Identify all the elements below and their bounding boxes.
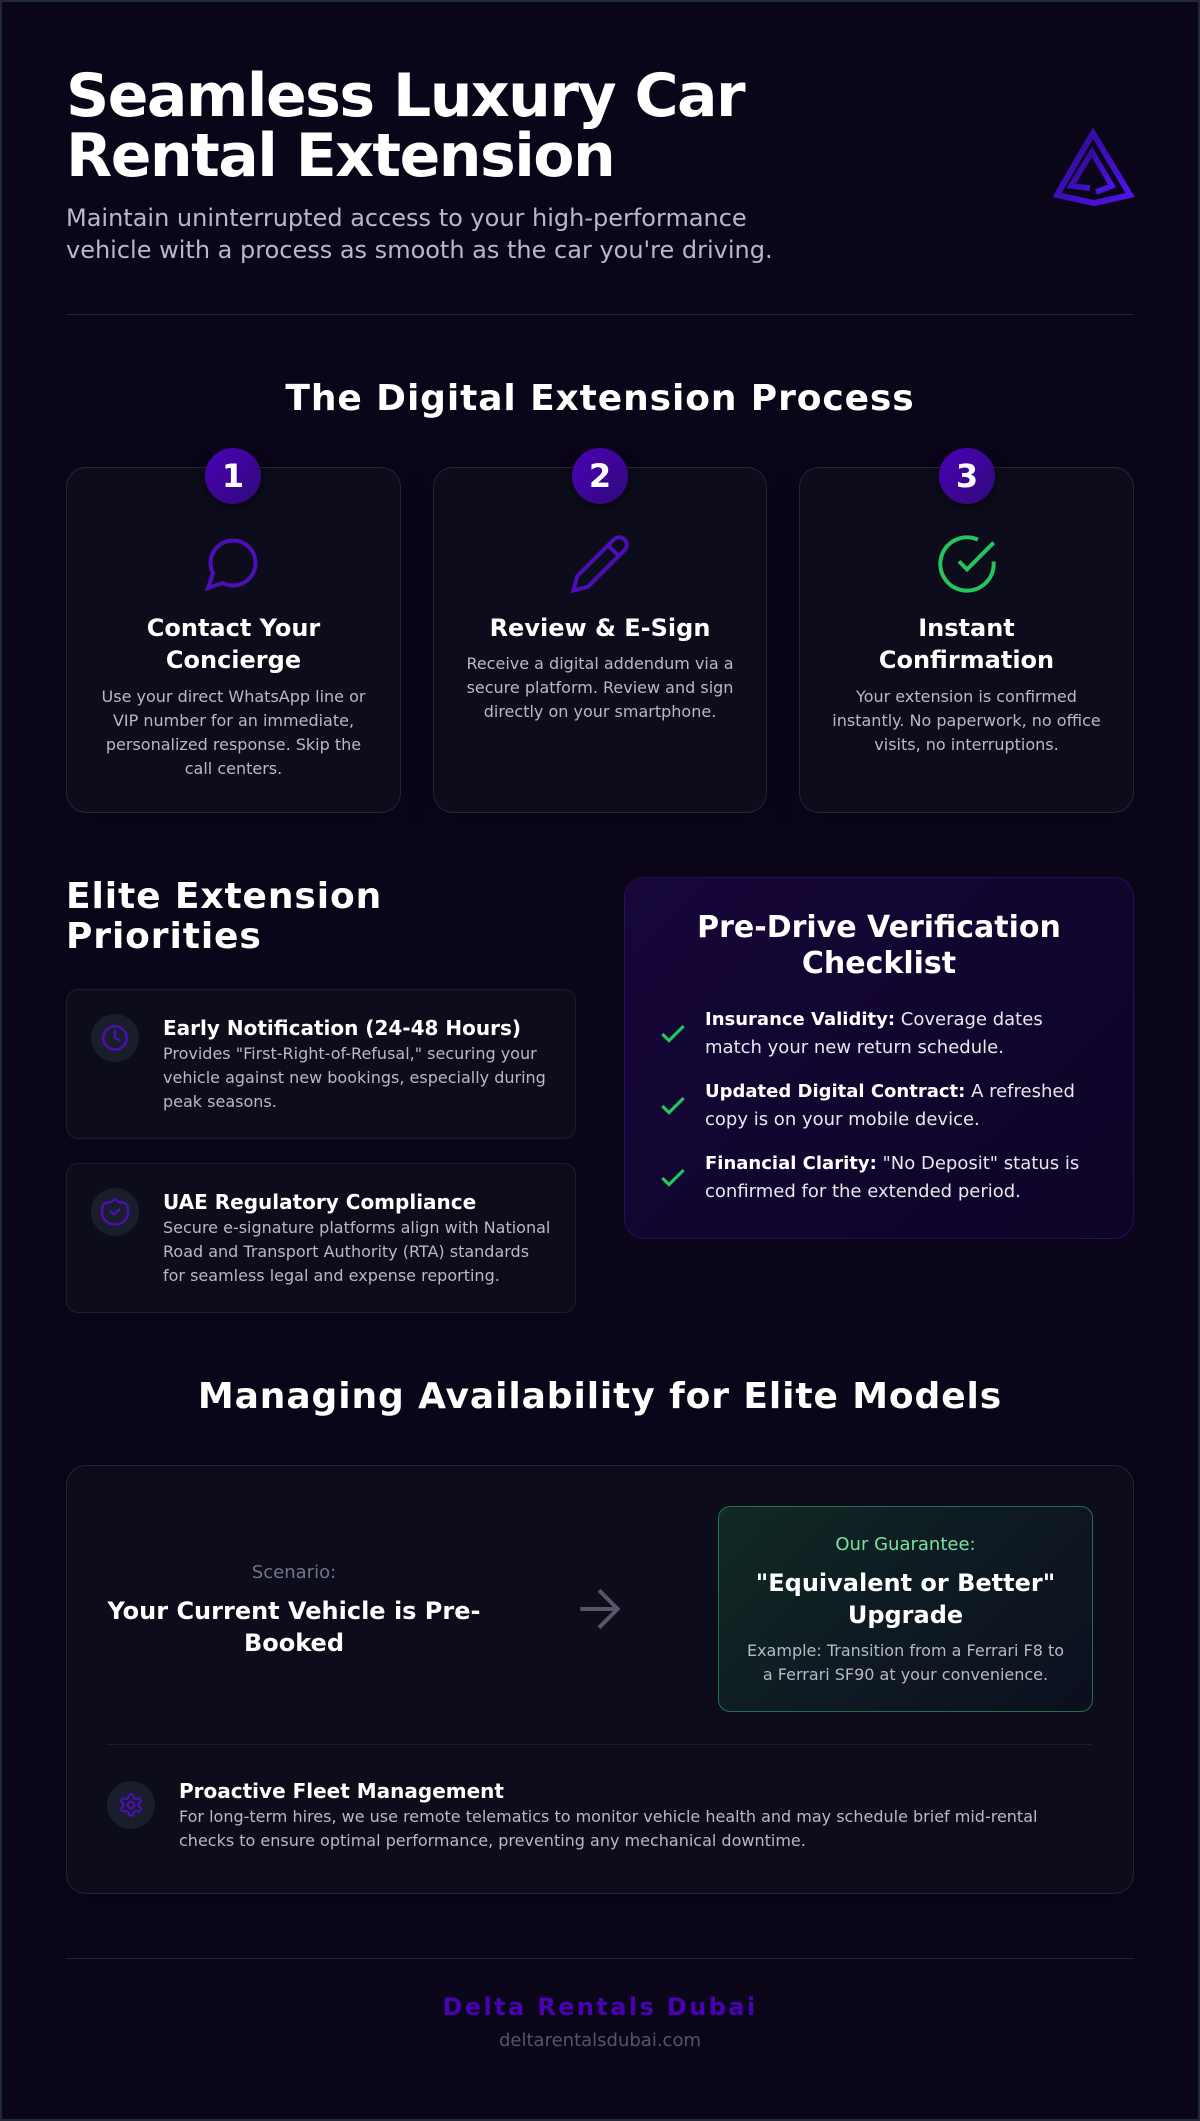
- compliance text: [163, 1218, 550, 1285]
- panel: availability: [66, 1465, 1134, 1894]
- title: Seamless Luxury Car: [66, 61, 744, 131]
- title: Rental Extension: [66, 121, 614, 191]
- compliance text: for seamless legal and expense reporting.: [163, 1266, 500, 1285]
- fleet text: checks to ensure optimal performance, preventing any mechanical downtime.: [179, 1831, 806, 1850]
- checklist item 1: match your new return schedule.: [705, 1037, 1004, 1058]
- panel: checklist: [624, 877, 1134, 1239]
- step 3 text: visits, no interruptions.: [874, 735, 1059, 754]
- panel: compliance: [66, 1163, 576, 1313]
- panel: guarantee: [718, 1506, 1093, 1712]
- step 3 title: Instant: [918, 614, 1015, 642]
- checklist item 2: [705, 1081, 1075, 1130]
- footer brand: Delta Rentals Dubai: [442, 1993, 758, 2021]
- checklist item 2: copy is on your mobile device.: [705, 1109, 980, 1130]
- step 3 number: [939, 448, 995, 504]
- icon: speech bubble: [204, 538, 258, 592]
- early notification text: Provides "First-Right-of-Refusal," securing your: [163, 1044, 537, 1063]
- step 1 text: [102, 687, 366, 778]
- step 3 title: [879, 614, 1054, 674]
- step 1 title: Concierge: [166, 646, 301, 674]
- panel: step 1: [66, 467, 401, 813]
- step 3 title: Confirmation: [879, 646, 1054, 674]
- step 2 number: 2: [589, 457, 611, 495]
- guarantee example: [747, 1641, 1064, 1684]
- compliance text: Road and Transport Authority (RTA) standards: [163, 1242, 529, 1261]
- icon: check 2: [661, 1096, 685, 1115]
- step 2 title: Review & E-Sign: [490, 614, 710, 642]
- panel: step 2: [433, 467, 767, 813]
- checklist item 3: confirmed for the extended period.: [705, 1181, 1021, 1202]
- footer url: deltarentalsdubai.com: [499, 2030, 701, 2051]
- step 3 text: instantly. No paperwork, no office: [832, 711, 1101, 730]
- heading: elite priorities: Elite Extension: [66, 876, 382, 917]
- step 1 text: Use your direct WhatsApp line or: [102, 687, 365, 706]
- guarantee title: "Equivalent or Better": [756, 1569, 1055, 1597]
- step 2 text: Receive a digital addendum via a: [466, 654, 734, 673]
- heading: digital process: The Digital Extension Process: [285, 378, 915, 419]
- icon: check circle: [938, 535, 996, 593]
- icon: gear: [107, 1781, 155, 1829]
- panel: early notification: [66, 989, 576, 1139]
- arrow: [580, 1589, 620, 1629]
- step 1 text: VIP number for an immediate,: [113, 711, 354, 730]
- step 1 number: [205, 448, 261, 504]
- step 1 number: 1: [222, 457, 244, 495]
- step 3 text: Your extension is confirmed: [856, 687, 1077, 706]
- step 3 text: [832, 687, 1101, 754]
- heading: managing availability: Managing Availability for Elite Models: [198, 1376, 1002, 1417]
- subtitle: Maintain uninterrupted access to your high-performance: [66, 204, 747, 232]
- subtitle: vehicle with a process as smooth as the car you're driving.: [66, 236, 773, 264]
- step 2 number: [572, 448, 628, 504]
- step 1 title: Contact Your: [147, 614, 320, 642]
- checklist item 1: [705, 1009, 1043, 1058]
- step 2 text: directly on your smartphone.: [484, 702, 716, 721]
- icon: pencil: [570, 535, 629, 594]
- icon: delta logo: [1052, 127, 1135, 206]
- icon: check 1: [661, 1024, 685, 1043]
- fleet text: For long-term hires, we use remote telematics to monitor vehicle health and may schedule brief mid-rental: [179, 1807, 1037, 1826]
- compliance title: UAE Regulatory Compliance: [163, 1190, 476, 1214]
- checklist title: Checklist: [802, 946, 956, 981]
- checklist item 1: Insurance Validity: Coverage dates: [705, 1009, 1043, 1030]
- compliance text: Secure e-signature platforms align with National: [163, 1218, 550, 1237]
- scenario title: Booked: [244, 1629, 344, 1657]
- checklist item 3: [705, 1153, 1079, 1202]
- subtitle: [66, 204, 773, 264]
- guarantee example: Example: Transition from a Ferrari F8 to: [747, 1641, 1064, 1660]
- heading: elite priorities: [66, 876, 382, 957]
- title: [66, 61, 746, 191]
- checklist item 2: Updated Digital Contract: A refreshed: [705, 1081, 1075, 1102]
- checklist title: [697, 910, 1061, 981]
- heading: elite priorities: Priorities: [66, 916, 262, 957]
- checklist title: Pre-Drive Verification: [697, 910, 1061, 945]
- fleet text: [179, 1807, 1037, 1850]
- step 1 text: personalized response. Skip the: [106, 735, 361, 754]
- early notification title: Early Notification (24-48 Hours): [163, 1016, 521, 1040]
- guarantee label: Our Guarantee:: [835, 1534, 976, 1555]
- checklist item 3: Financial Clarity: "No Deposit" status is: [705, 1153, 1079, 1174]
- panel: step 3: [799, 467, 1134, 813]
- icon: clock: [91, 1014, 139, 1062]
- guarantee title: [756, 1569, 1055, 1629]
- step 2 text: [466, 654, 734, 721]
- early notification text: peak seasons.: [163, 1092, 277, 1111]
- scenario title: [107, 1597, 480, 1657]
- early notification text: vehicle against new bookings, especially during: [163, 1068, 546, 1087]
- step 1 title: [147, 614, 320, 674]
- scenario label: Scenario:: [252, 1562, 336, 1583]
- icon: shield: [91, 1188, 139, 1236]
- scenario title: Your Current Vehicle is Pre-: [108, 1597, 480, 1625]
- step 2 text: secure platform. Review and sign: [467, 678, 733, 697]
- guarantee example: a Ferrari SF90 at your convenience.: [763, 1665, 1048, 1684]
- step 1 text: call centers.: [185, 759, 282, 778]
- early notification text: [163, 1044, 546, 1111]
- fleet title: Proactive Fleet Management: [179, 1779, 504, 1803]
- step 3 number: 3: [956, 457, 978, 495]
- guarantee title: Upgrade: [848, 1601, 963, 1629]
- icon: check 3: [661, 1168, 685, 1187]
